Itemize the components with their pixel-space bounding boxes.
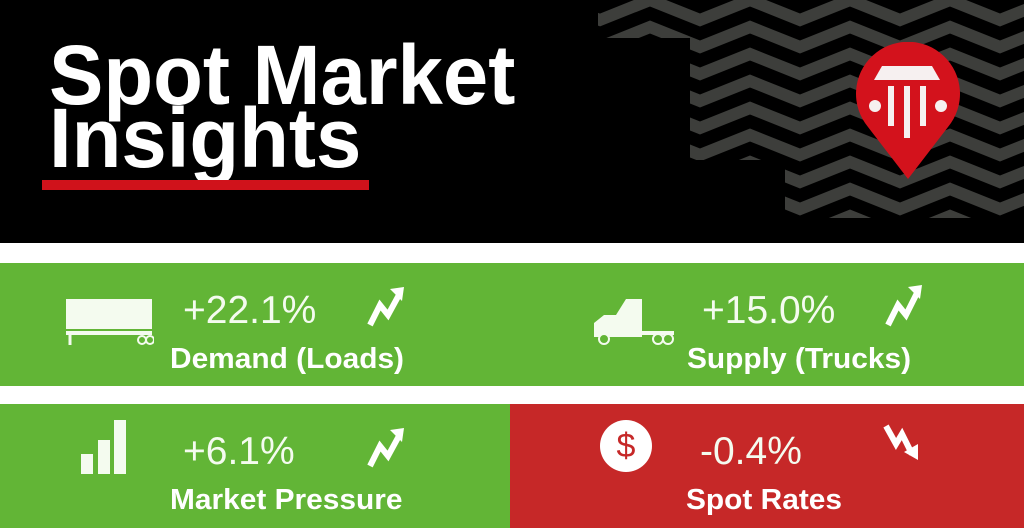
icon: truck <box>594 299 674 345</box>
icon: dollar coin: $ <box>617 427 635 465</box>
panel: spot rates <box>510 404 1024 528</box>
value: +22.1% <box>183 289 316 332</box>
icon: dollar coin <box>600 420 652 472</box>
chevron pattern <box>598 0 1024 218</box>
title underline <box>42 180 369 190</box>
title: Spot Market <box>49 28 515 122</box>
header panel <box>0 0 1024 243</box>
icon: bars <box>81 420 126 474</box>
title <box>49 28 515 185</box>
icon: up arrow <box>885 285 922 326</box>
icon: up arrow <box>367 428 404 468</box>
icon: location pin logo <box>856 42 960 179</box>
panel: supply <box>512 263 1024 386</box>
value: -0.4% <box>700 430 802 473</box>
label: Market Pressure <box>170 484 402 516</box>
icon: up arrow <box>367 287 404 326</box>
value: +6.1% <box>183 430 295 473</box>
title: Insights <box>49 91 361 185</box>
panel: market pressure <box>0 404 512 528</box>
label: Spot Rates <box>686 484 842 516</box>
icon: trailer <box>66 299 154 345</box>
icon: down arrow <box>884 424 918 460</box>
panel: demand <box>0 263 512 386</box>
label: Demand (Loads) <box>170 343 404 375</box>
label: Supply (Trucks) <box>687 343 911 375</box>
value: +15.0% <box>702 289 835 332</box>
